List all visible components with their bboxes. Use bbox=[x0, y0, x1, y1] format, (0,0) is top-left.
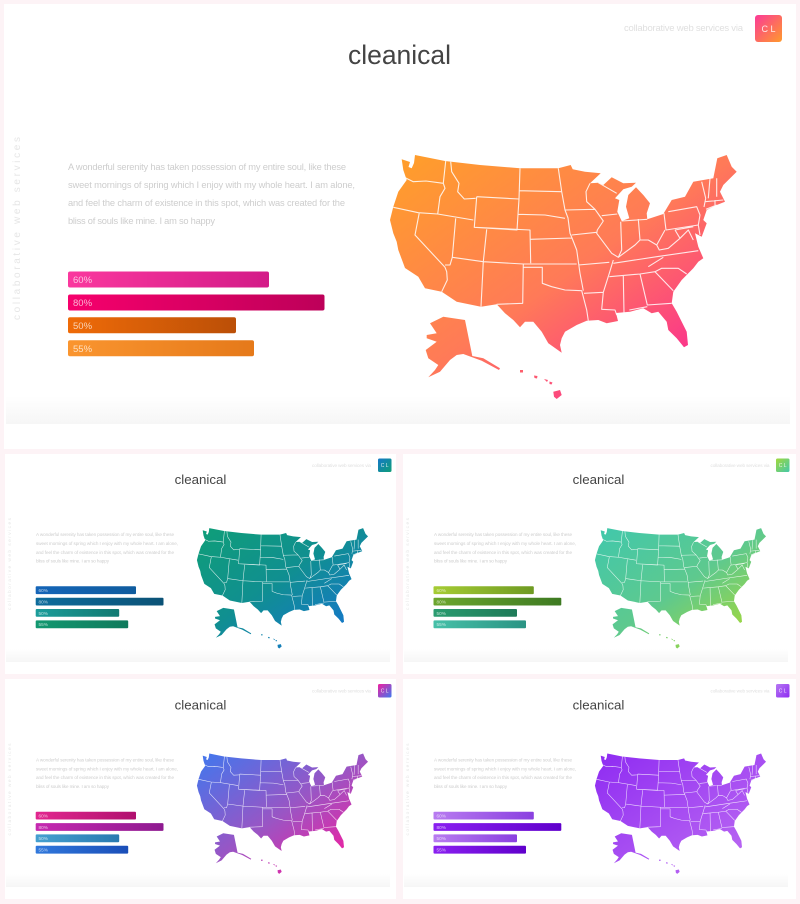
US map bbox=[595, 753, 766, 874]
bar chart bbox=[434, 812, 561, 854]
vertical side label: collaborative web services bbox=[405, 743, 411, 836]
body text: A wonderful serenity has taken possession of my entire soul, like these bbox=[434, 532, 572, 537]
logo badge bbox=[378, 684, 392, 698]
bar chart bbox=[36, 812, 164, 854]
bar chart: 60% bbox=[38, 813, 48, 818]
title: cleanical bbox=[573, 472, 624, 487]
bottom shadow band bbox=[404, 649, 788, 662]
bar chart: 55% bbox=[436, 622, 446, 627]
logo badge: C L bbox=[381, 463, 389, 469]
logo badge: C L bbox=[779, 688, 787, 694]
bar chart: 80% bbox=[38, 825, 48, 830]
bar chart: 60% bbox=[38, 588, 48, 593]
body text bbox=[36, 532, 178, 564]
body text: bliss of souls like mine. I am so happy bbox=[434, 559, 508, 564]
logo badge: C L bbox=[381, 688, 389, 694]
bottom shadow band bbox=[6, 874, 390, 887]
logo badge: C L bbox=[779, 463, 787, 469]
body text: A wonderful serenity has taken possession of my entire soul, like these bbox=[68, 162, 346, 172]
bar chart: 55% bbox=[38, 622, 48, 627]
body text: sweet mornings of spring which I enjoy with my whole heart. I am alone, bbox=[434, 541, 576, 546]
header tagline: collaborative web services via bbox=[710, 688, 770, 694]
title: cleanical bbox=[175, 698, 226, 712]
header tagline: collaborative web services via bbox=[312, 463, 371, 468]
US map bbox=[595, 528, 766, 649]
logo badge bbox=[755, 15, 782, 42]
title: cleanical bbox=[348, 40, 451, 70]
header tagline: collaborative web services via bbox=[624, 23, 744, 34]
body text: sweet mornings of spring which I enjoy with my whole heart. I am alone, bbox=[36, 541, 178, 546]
panel: green slide bbox=[403, 454, 796, 674]
body text: A wonderful serenity has taken possession of my entire soul, like these bbox=[36, 532, 174, 537]
body text bbox=[68, 162, 355, 226]
body text: bliss of souls like mine. I am so happy bbox=[36, 559, 110, 564]
bar chart: 50% bbox=[436, 611, 446, 616]
title: cleanical bbox=[573, 698, 624, 712]
bar chart: 50% bbox=[436, 836, 446, 841]
bar chart: 55% bbox=[38, 847, 48, 852]
vertical side label: collaborative web services bbox=[12, 137, 23, 320]
body text: sweet mornings of spring which I enjoy with my whole heart. I am alone, bbox=[434, 766, 576, 771]
panel: teal-blue slide bbox=[5, 454, 396, 674]
logo badge bbox=[776, 684, 790, 698]
vertical side label: collaborative web services bbox=[7, 517, 13, 610]
bar chart bbox=[68, 272, 324, 356]
logo badge bbox=[378, 458, 392, 472]
panel: blue-magenta slide bbox=[5, 679, 396, 899]
bottom shadow band bbox=[404, 874, 788, 887]
logo badge: C L bbox=[761, 24, 776, 34]
title: cleanical bbox=[175, 472, 226, 487]
body text: sweet mornings of spring which I enjoy with my whole heart. I am alone, bbox=[36, 766, 178, 771]
bottom shadow band bbox=[6, 649, 390, 662]
body text: and feel the charm of existence in this spot, which was created for the bbox=[434, 550, 572, 555]
body text: and feel the charm of existence in this spot, which was created for the bbox=[36, 775, 174, 780]
US map bbox=[197, 528, 368, 649]
body text: sweet mornings of spring which I enjoy with my whole heart. I am alone, bbox=[68, 180, 355, 190]
body text: A wonderful serenity has taken possession of my entire soul, like these bbox=[36, 758, 174, 763]
bar chart: 80% bbox=[436, 599, 446, 604]
body text bbox=[434, 532, 576, 564]
body text: A wonderful serenity has taken possession of my entire soul, like these bbox=[434, 758, 572, 763]
panel: main orange-pink slide bbox=[4, 4, 796, 449]
bar chart: 50% bbox=[73, 321, 93, 332]
bar chart: 60% bbox=[436, 588, 446, 593]
US map bbox=[197, 753, 368, 874]
bar chart: 80% bbox=[436, 825, 446, 830]
bar chart: 55% bbox=[436, 847, 446, 852]
body text bbox=[434, 758, 576, 789]
body text: bliss of souls like mine. I am so happy bbox=[36, 784, 110, 789]
bar chart: 60% bbox=[436, 813, 446, 818]
body text: bliss of souls like mine. I am so happy bbox=[68, 216, 215, 226]
bar chart: 80% bbox=[38, 599, 48, 604]
bar chart: 50% bbox=[38, 611, 48, 616]
body text: and feel the charm of existence in this spot, which was created for the bbox=[434, 775, 572, 780]
body text: and feel the charm of existence in this spot, which was created for the bbox=[68, 198, 345, 208]
bar chart: 60% bbox=[73, 275, 93, 286]
header tagline: collaborative web services via bbox=[312, 688, 371, 694]
logo badge bbox=[776, 458, 790, 472]
header tagline: collaborative web services via bbox=[710, 463, 770, 468]
bottom shadow band bbox=[6, 396, 790, 424]
body text: and feel the charm of existence in this spot, which was created for the bbox=[36, 550, 174, 555]
bar chart bbox=[434, 586, 561, 628]
US map bbox=[390, 155, 737, 399]
vertical side label: collaborative web services bbox=[7, 743, 13, 836]
bar chart: 80% bbox=[73, 298, 93, 309]
panel: purple slide bbox=[403, 679, 796, 899]
bar chart: 50% bbox=[38, 836, 48, 841]
vertical side label: collaborative web services bbox=[405, 517, 411, 610]
body text bbox=[36, 758, 178, 789]
bar chart bbox=[36, 586, 164, 628]
body text: bliss of souls like mine. I am so happy bbox=[434, 784, 508, 789]
bar chart: 55% bbox=[73, 344, 93, 355]
